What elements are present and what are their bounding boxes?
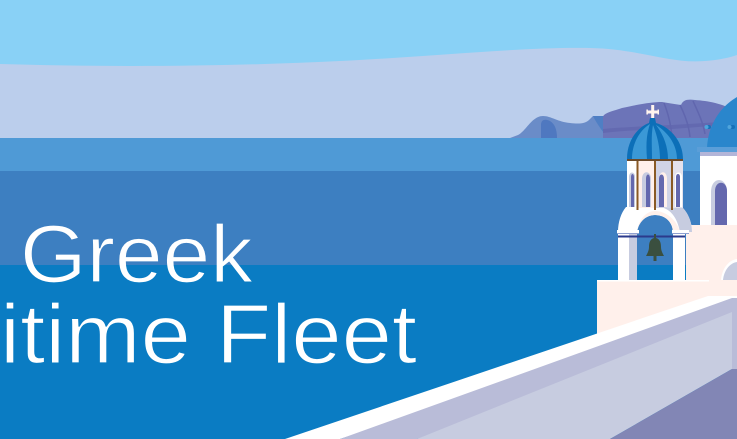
tower dome	[627, 118, 683, 159]
sea band: far	[0, 138, 737, 171]
title line 1: Greek	[20, 209, 254, 300]
bell	[646, 234, 664, 261]
title line 2: itime Fleet	[0, 287, 417, 381]
sky	[0, 0, 737, 140]
title	[0, 209, 417, 381]
sea band: middle	[0, 171, 737, 265]
sea band: near	[0, 265, 737, 439]
cream terrace	[597, 280, 737, 336]
sea wall	[285, 296, 737, 439]
small dome behind terrace	[721, 259, 737, 280]
cross	[646, 105, 659, 120]
belfry arch	[617, 207, 692, 281]
bell tower	[617, 105, 692, 281]
tower drum	[627, 159, 683, 210]
dome dots	[704, 125, 735, 129]
distant haze hills	[0, 48, 737, 140]
distant island	[510, 100, 737, 138]
cream block behind the tower	[686, 225, 737, 285]
large blue dome building	[697, 97, 737, 227]
